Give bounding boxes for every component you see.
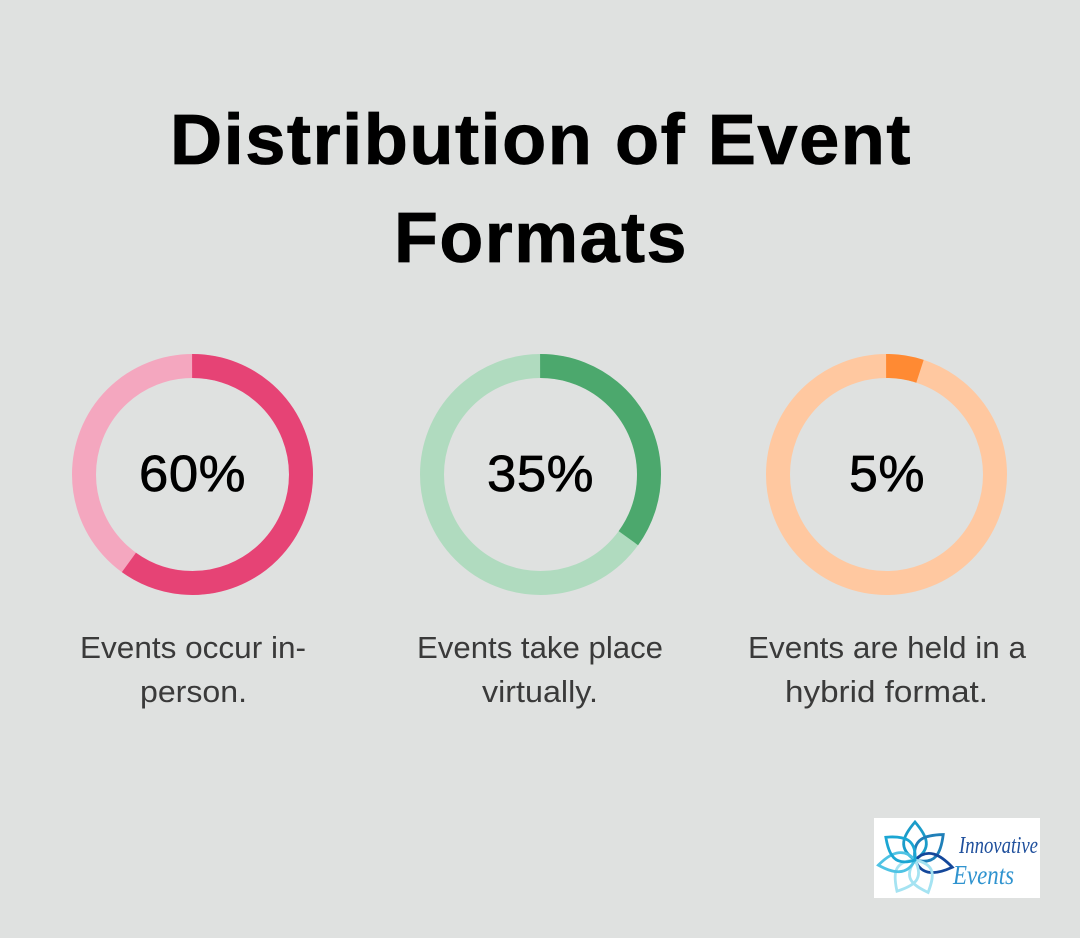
value: 60%: 60% (139, 445, 246, 502)
logo wordmark (952, 833, 1038, 890)
logo wordmark: Innovative (958, 833, 1038, 859)
donut chart: 35% (432, 366, 649, 583)
caption: hybrid: Events are held in a (748, 630, 1027, 665)
icon: lotus flower (877, 822, 954, 897)
panel: in-person events (80, 366, 306, 709)
panel: virtual events (417, 366, 663, 709)
caption: virtual: virtually. (482, 674, 598, 709)
logo wordmark: Events (952, 860, 1014, 890)
caption: virtual: Events take place (417, 630, 663, 665)
title: Distribution of Event (170, 100, 912, 180)
caption: in-person (80, 630, 306, 709)
value: 35%: 35% (487, 445, 594, 502)
value: 5%: 5% (849, 445, 925, 502)
donut chart: 60% (84, 366, 301, 583)
donut chart: 5% (778, 366, 995, 583)
title: Formats (394, 198, 688, 278)
caption: in-person: Events occur in- (80, 630, 306, 665)
caption: hybrid: hybrid format. (785, 674, 988, 709)
caption: in-person: person. (140, 674, 247, 709)
title (170, 100, 912, 278)
caption: hybrid (748, 630, 1027, 709)
logo: Innovative Events (874, 818, 1040, 898)
caption: virtual (417, 630, 663, 709)
panel: hybrid events (748, 366, 1027, 709)
